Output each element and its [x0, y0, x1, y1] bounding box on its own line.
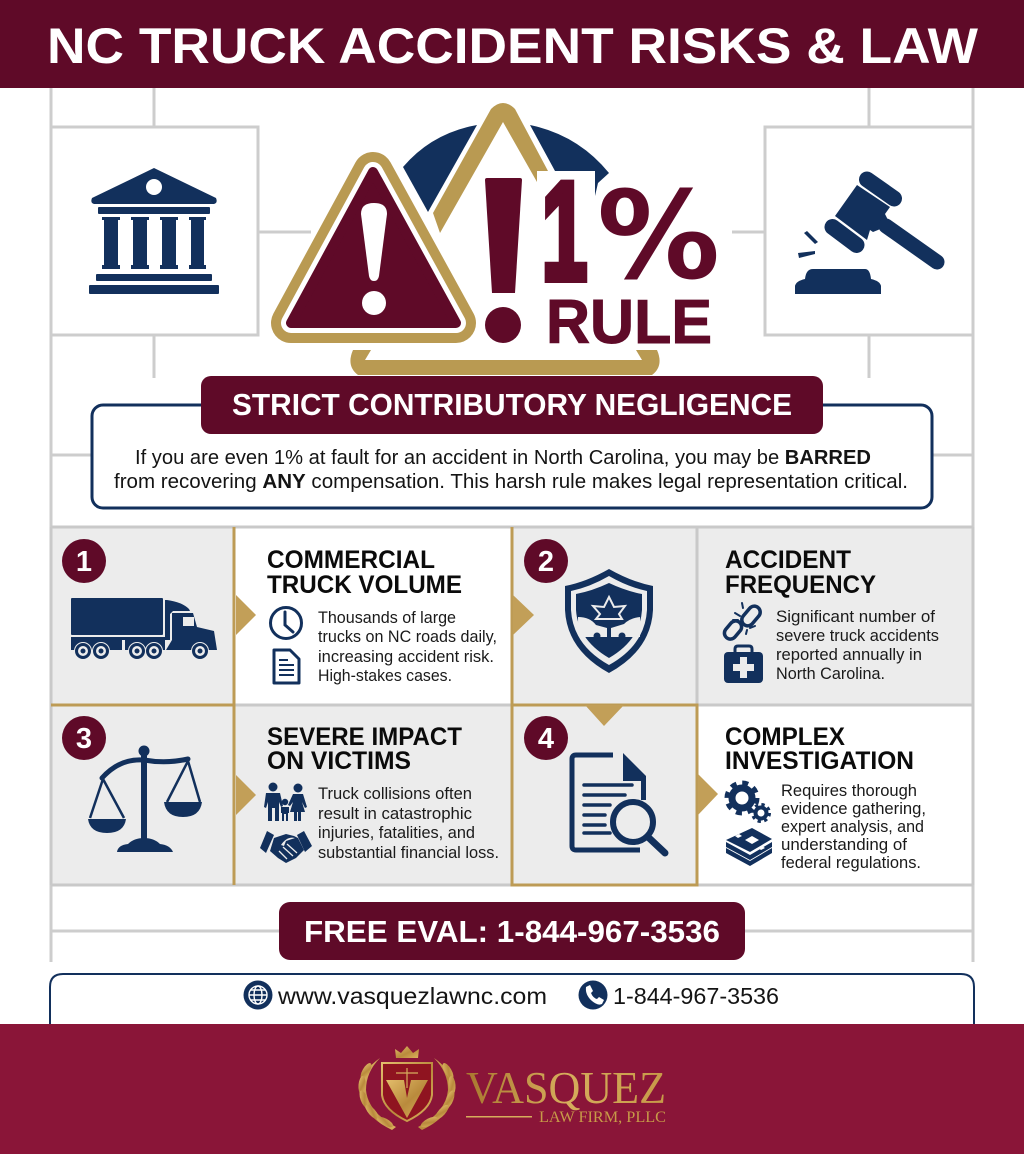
body text: result in catastrophic [318, 805, 472, 823]
cell 2: accident frequency [524, 539, 939, 683]
heading: TRUCK VOLUME [267, 571, 462, 599]
shield [382, 1063, 432, 1121]
panel: strict contributory negligence [92, 376, 932, 508]
icon: phone [578, 980, 608, 1010]
body text: High-stakes cases. [318, 667, 452, 685]
icon: family [264, 782, 307, 821]
body text: trucks on NC roads daily, [318, 628, 497, 646]
heading banner [201, 376, 823, 434]
heading: COMMERCIAL [267, 546, 435, 574]
explanation text: from recovering ANY compensation. This harsh rule makes legal representation critical. [114, 471, 908, 493]
body text: severe truck accidents [776, 627, 939, 645]
logo: wordmark: VASQUEZ [466, 1063, 666, 1113]
big exclamation mark [485, 178, 522, 343]
icon: broken chain [722, 603, 763, 642]
1% label: 1 [542, 152, 588, 310]
heading: ACCIDENT [725, 546, 851, 574]
explanation text: If you are even 1% at fault for an accident in North Carolina, you may be BARRED [135, 447, 871, 469]
panel: four-factor grid [51, 527, 973, 885]
crown [395, 1046, 419, 1058]
number badge 4 [524, 716, 568, 760]
heading: SEVERE IMPACT [267, 723, 462, 751]
body text: Truck collisions often [318, 785, 472, 803]
body text [781, 782, 926, 872]
icon: globe [244, 980, 272, 1010]
heading: ON VICTIMS [267, 747, 411, 775]
warning triangle [291, 172, 456, 323]
icon: document [274, 650, 299, 683]
icon: handshake [260, 831, 312, 863]
number badge 1: 1 [76, 546, 92, 578]
heading banner: STRICT CONTRIBUTORY NEGLIGENCE [232, 387, 792, 422]
cell 3: severe impact on victims [62, 716, 499, 863]
heading [725, 723, 914, 775]
body text: Significant number of [776, 608, 935, 626]
body text: injuries, fatalities, and [318, 824, 475, 842]
icon: clock [270, 608, 302, 638]
body text: substantial financial loss. [318, 844, 499, 862]
body text: Thousands of large [318, 609, 456, 627]
number badge 1 [62, 539, 106, 583]
body text: North Carolina. [776, 665, 885, 683]
body text: expert analysis, and [781, 818, 924, 836]
logo: crest [358, 1046, 456, 1130]
V emblem [386, 1080, 428, 1118]
icon: scales of justice [88, 746, 202, 852]
icon: truck [71, 598, 217, 660]
heading: FREQUENCY [725, 571, 876, 599]
body text: Requires thorough [781, 782, 917, 800]
call to action: free evaluation [279, 902, 745, 960]
phone number: 1-844-967-3536 [613, 983, 779, 1009]
icon: warning graphic with 1% rule [291, 103, 720, 375]
body text: understanding of [781, 836, 907, 854]
body text: increasing accident risk. [318, 648, 494, 666]
arrows between cells [236, 595, 718, 815]
number badge 2: 2 [538, 546, 554, 578]
blue arc behind triangle [403, 125, 609, 212]
body text [776, 608, 939, 683]
icon: crash shield [565, 569, 653, 673]
heading: COMPLEX [725, 723, 845, 751]
number badge 3 [62, 716, 106, 760]
number badge 3: 3 [76, 723, 92, 755]
laurel wreath [358, 1058, 456, 1130]
heading: INVESTIGATION [725, 747, 914, 775]
title banner [0, 0, 1024, 88]
title banner: NC TRUCK ACCIDENT RISKS & LAW [47, 18, 979, 74]
call to action: free evaluation: FREE EVAL: 1-844-967-3536 [304, 914, 720, 949]
contact bar [50, 974, 974, 1030]
1% label: % [597, 166, 720, 307]
number badge 2 [524, 539, 568, 583]
explanation text [114, 447, 908, 493]
1% label [542, 152, 720, 310]
icon: gavel [795, 180, 937, 294]
heading [267, 546, 462, 599]
icon: money stack [726, 828, 772, 866]
logo: wordmark: LAW FIRM, PLLC [539, 1109, 666, 1126]
number badge 4: 4 [538, 723, 554, 755]
icon: medical kit [724, 646, 763, 683]
body text: evidence gathering, [781, 800, 926, 818]
cell 4: complex investigation [524, 716, 926, 872]
body text: reported annually in [776, 646, 922, 664]
icon: gears [727, 783, 770, 822]
body text [318, 609, 497, 685]
large gold outline triangle [350, 103, 660, 375]
website: www.vasquezlawnc.com [277, 983, 547, 1009]
heading [725, 546, 876, 599]
body text: federal regulations. [781, 854, 921, 872]
heading [267, 723, 462, 775]
body text [318, 785, 499, 862]
icon: courthouse [89, 168, 219, 294]
footer band with logo [0, 1024, 1024, 1154]
cell 1: commercial truck volume [62, 539, 497, 685]
icon: document with magnifier [572, 753, 665, 853]
rule label: RULE [546, 288, 712, 357]
